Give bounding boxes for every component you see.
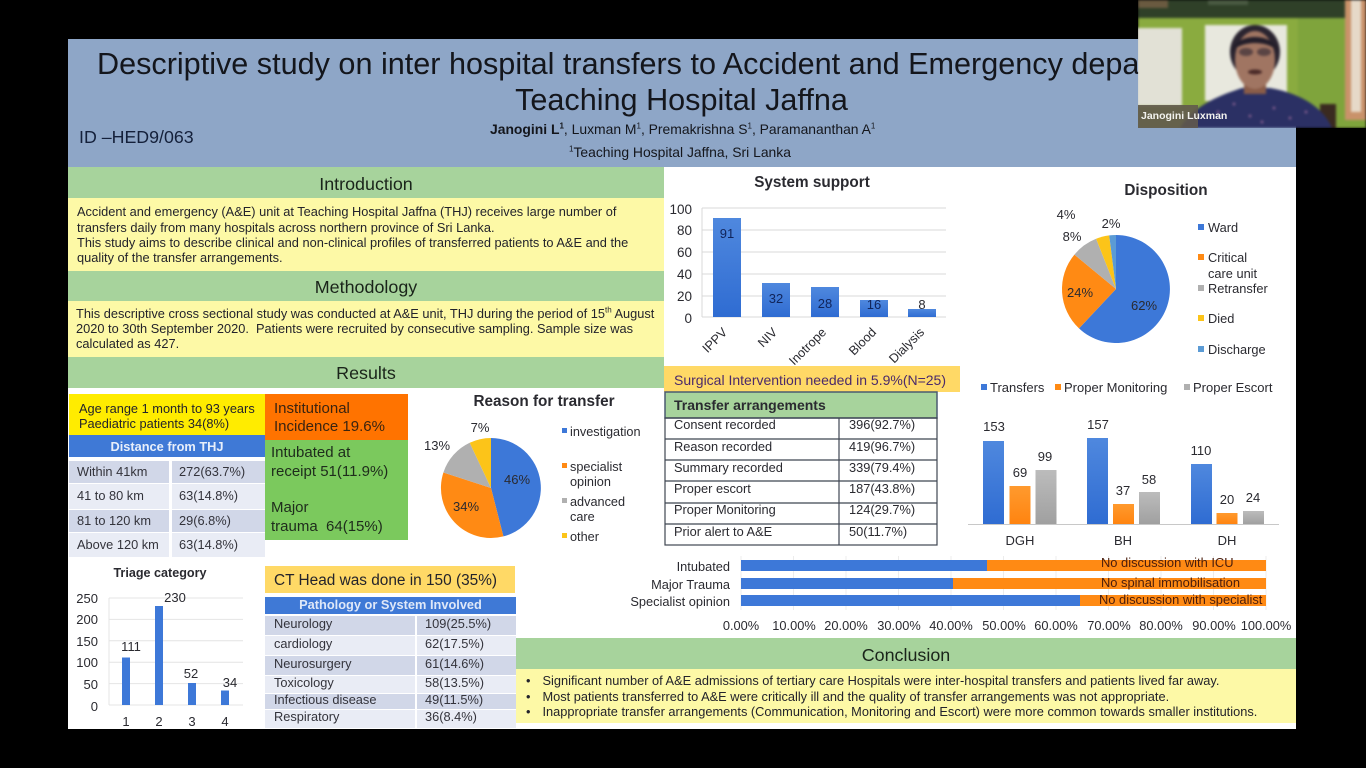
transfer row values: 124(29.7%) [849,502,915,517]
callout: institutional incidence [265,394,408,440]
callout: age range [69,394,265,435]
pie values: 34% [453,499,479,514]
system support values: 91 [720,226,734,241]
value 63 [172,484,265,509]
legend: advanced [570,495,625,509]
pathology header: Pathology or System Involved [299,597,482,612]
panel: conclusion text [516,669,1296,723]
hospital chart categories [1006,533,1236,548]
introduction line 2: transfers daily from many hospitals across northern province of Sri Lanka. [77,220,495,234]
system support y axis: 80 [677,223,692,238]
transfer row labels: Proper escort [674,481,751,496]
system support categories [700,325,927,368]
bar category labels: Specialist opinion [630,594,730,609]
system support categories: Inotrope [786,325,829,368]
row neurology [265,616,415,635]
panel: introduction heading [68,167,664,198]
legend [562,425,641,544]
transfer row labels: Summary recorded [674,460,783,475]
introduction line 4: quality of the transfer arrangements. [77,250,283,265]
row infectious disease [265,694,415,709]
callout: institutional incidence: Incidence 19.6% [274,418,385,435]
value 63 second [172,533,265,557]
panel: methodology heading: Methodology [315,276,417,296]
system support y axis: 100 [669,202,692,217]
value neurology: 109(25.5%) [425,616,491,631]
value toxicology [417,676,516,693]
value cardiology [417,636,516,655]
triage x axis: 1 [122,714,130,729]
disposition values: 4% [1057,207,1076,222]
triage x axis [122,714,229,729]
affiliation: 1Teaching Hospital Jaffna, Sri Lanka [569,144,791,160]
percent axis: 40.00% [929,618,973,633]
percent axis: 70.00% [1087,618,1131,633]
bar annotations: No discussion with specialist [1099,592,1263,607]
triage y axis [76,591,98,714]
triage bars [122,606,229,705]
value neurosurgery: 61(14.6%) [425,656,484,671]
pie values: 46% [504,472,530,487]
transfer row values: 187(43.8%) [849,481,915,496]
row 41 to 80 [69,484,169,509]
distance header [69,435,265,457]
slice ward [1079,235,1170,343]
value cardiology: 62(17.5%) [425,636,484,651]
legend: specialist [570,460,623,474]
disposition values: 2% [1102,216,1121,231]
abstract ID: ID –HED9/063 [79,127,194,147]
row above 120: Above 120 km [77,537,159,552]
hospital chart values: 37 [1116,483,1130,498]
row within 41km [69,461,169,483]
disposition legend [1198,220,1268,357]
blue bar segments [741,560,1080,606]
disposition legend: Critical [1208,250,1247,265]
row toxicology [265,676,415,693]
orange bar segments [953,560,1266,606]
transfer row values: 339(79.4%) [849,460,915,475]
triage title: Triage category [113,566,207,580]
triage y axis: 200 [76,612,98,627]
system support y axis: 60 [677,245,692,260]
triage y axis: 0 [91,699,98,714]
hospital chart values: 24 [1246,490,1260,505]
system support y axis: 0 [684,311,692,326]
callout: intubated and major trauma: Major [271,499,309,516]
triage values: 230 [164,590,186,605]
percent axis: 80.00% [1139,618,1183,633]
header band [68,39,1296,167]
slice other [470,438,491,488]
triage values [121,590,237,690]
triage values: 34 [223,675,237,690]
value 63 second: 63(14.8%) [179,537,238,552]
hospital chart categories: DH [1218,533,1236,548]
system support values [720,226,926,312]
conclusion bullet 1: • Significant number of A&E admissions of tertiary care Hospitals were inter-hospital transfers and patients lived far away. [526,673,1219,688]
hospital chart bars [983,438,1264,524]
system support categories: NIV [755,325,780,350]
hospital chart values: 99 [1038,449,1052,464]
hospital chart legend [981,380,1273,395]
bar category labels: Intubated [677,559,730,574]
pie values: 7% [471,420,490,435]
row toxicology: Toxicology [274,675,334,690]
hospital chart values: 58 [1142,472,1156,487]
methodology line 3: calculated as 427. [76,336,179,351]
disposition legend: Discharge [1208,342,1266,357]
value respiratory: 36(8.4%) [425,709,477,724]
slice investigation [491,438,541,536]
bar annotations: No discussion with ICU [1101,555,1234,570]
row cardiology [265,636,415,655]
hospital chart values: 153 [983,419,1005,434]
value toxicology: 58(13.5%) [425,675,484,690]
percent axis [723,618,1291,633]
hospital chart values: 20 [1220,492,1234,507]
disposition values [1057,207,1157,313]
percent axis: 60.00% [1034,618,1078,633]
bar annotations: No spinal immobilisation [1101,575,1240,590]
pie values: 13% [424,438,450,453]
callout: intubated and major trauma: trauma 64(15%) [271,518,383,534]
transfer row labels [674,417,783,539]
chart title: Reason for transfer [473,393,615,410]
slice specialist opinion [441,472,503,538]
panel: conclusion heading [516,638,1296,669]
bar category labels: Major Trauma [651,577,731,592]
panel: introduction heading: Introduction [319,174,413,194]
distance header: Distance from THJ [110,439,224,454]
row 81 to 120 [69,510,169,532]
transfer row labels: Consent recorded [674,417,776,432]
legend: investigation [570,425,641,439]
disposition values: 62% [1131,298,1157,313]
disposition legend: Retransfer [1208,281,1268,296]
transfer row values [849,417,915,539]
value neurosurgery [417,656,516,675]
system support values: 28 [818,296,832,311]
disposition values: 8% [1063,229,1082,244]
hospital chart values: 157 [1087,417,1109,432]
transfer row values: 50(11.7%) [849,524,907,539]
hospital chart values: 69 [1013,465,1027,480]
disposition legend: Ward [1208,220,1238,235]
transfer grid [665,418,937,545]
transfer header: Transfer arrangements [674,397,826,413]
triage values: 111 [121,639,141,654]
system support y axis [669,202,692,326]
row respiratory: Respiratory [274,709,339,724]
callout: intubated and major trauma [265,440,408,540]
row 81 to 120: 81 to 120 km [77,513,151,528]
row within 41km: Within 41km [77,464,147,479]
authors: Janogini L1, Luxman M1, Premakrishna S1, Paramananthan A1 [490,121,875,137]
hospital chart values [983,417,1260,507]
slice discharge [1109,235,1116,289]
row infectious disease: Infectious disease [274,692,376,707]
row 41 to 80: 41 to 80 km [77,488,144,503]
callout: CT head [265,566,515,593]
panel: methodology text [68,301,664,357]
panel: methodology heading [68,271,664,301]
webcam overlay: presenter [1138,0,1366,128]
system support values: 8 [918,297,926,312]
slice retransfer [1074,239,1116,289]
triage y axis: 50 [84,677,98,692]
panel: introduction text [68,198,664,271]
value 29 [172,510,265,532]
hospital chart categories: DGH [1006,533,1034,548]
hospital chart categories: BH [1114,533,1132,548]
hospital chart legend: Proper Monitoring [1064,380,1167,395]
transfer row labels: Proper Monitoring [674,502,776,517]
callout: age range: Paediatric patients 34(8%) [79,416,229,431]
transfer row values: 396(92.7%) [849,417,915,432]
triage x axis: 4 [221,714,229,729]
conclusion bullet 2: • Most patients transferred to A&E were critically ill and the quality of transfer arrangements was not appropriate. [526,689,1169,704]
title: Descriptive study on inter hospital transfers to Accident and Emergency department [97,47,1226,81]
callout: institutional incidence: Institutional [274,400,350,417]
triage y axis: 150 [76,634,98,649]
presenter name: Janogini Luxman [1141,110,1227,122]
value 63: 63(14.8%) [179,488,238,503]
value 29: 29(6.8%) [179,513,231,528]
callout: intubated and major trauma: Intubated at [271,444,350,461]
row neurosurgery [265,656,415,675]
percent axis: 50.00% [982,618,1026,633]
percent axis: 100.00% [1241,618,1291,633]
value 272 [172,461,265,483]
percent axis: 10.00% [772,618,816,633]
introduction line 3: This study aims to describe clinical and non-clinical profiles of transferred patients to A&E and the [77,234,628,250]
slice critical care unit [1062,255,1116,328]
system support y axis: 20 [677,289,692,304]
pathology header [265,597,516,614]
triage x axis: 3 [188,714,196,729]
introduction line 1: Accident and emergency (A&E) unit at Teaching Hospital Jaffna (THJ) receives large number of [77,204,616,219]
percent axis: 30.00% [877,618,921,633]
table: pathology or system involved [265,597,516,728]
hospital chart values: 110 [1191,443,1211,458]
system support categories: Dialysis [886,325,927,366]
panel: conclusion heading: Conclusion [862,644,950,664]
callout: surgical intervention: Surgical Intervention needed in 5.9%(N=25) [674,372,946,388]
legend: other [570,530,600,544]
system support values: 32 [769,291,783,306]
system support values: 16 [867,297,881,312]
transfer row values: 419(96.7%) [849,439,915,454]
slice advanced care [443,443,491,488]
methodology line 1: This descriptive cross sectional study was conducted at A&E unit, THJ during the period of 15th August [76,306,654,321]
panel: results heading: Results [336,363,396,383]
bar annotations [1099,555,1263,607]
system support bars [713,218,936,317]
triage x axis: 2 [155,714,163,729]
disposition values: 24% [1067,285,1093,300]
table: distance from THJ [69,435,265,557]
callout: intubated and major trauma: receipt 51(11.9%) [271,462,388,480]
system support categories: Blood [846,325,879,358]
triage values: 52 [184,666,198,681]
transfer header [665,392,937,418]
bar category labels [630,559,731,609]
disposition title: Disposition [1124,182,1208,199]
system support title: System support [754,174,870,191]
row neurology: Neurology [274,616,332,631]
row respiratory [265,710,415,728]
callout: age range: Age range 1 month to 93 years [79,401,255,416]
triage y axis: 250 [76,591,98,606]
system support y axis: 40 [677,267,692,282]
disposition legend: care unit [1208,266,1258,281]
value respiratory [417,710,516,728]
disposition legend: Died [1208,311,1234,326]
slice died [1096,235,1116,289]
row above 120 [69,533,169,557]
row cardiology: cardiology [274,636,332,651]
value 272: 272(63.7%) [179,464,245,479]
percent axis: 20.00% [824,618,868,633]
callout: surgical intervention [664,366,960,392]
value neurology [417,616,516,635]
row neurosurgery: Neurosurgery [274,656,352,671]
hospital chart legend: Proper Escort [1193,380,1273,395]
methodology line 2: 2020 to 30th September 2020. Patients were recruited by consecutive sampling. Sample size was [76,321,633,336]
panel: results heading [68,357,664,388]
triage y axis: 100 [76,655,98,670]
percent axis: 90.00% [1192,618,1236,633]
pie values [424,420,530,514]
callout: CT head: CT Head was done in 150 (35%) [274,572,497,589]
conclusion bullet 3: • Inappropriate transfer arrangements (Communication, Monitoring and Escort) were more common towards smaller institutions. [526,704,1257,719]
legend: opinion [570,475,611,489]
percent axis: 0.00% [723,618,759,633]
transfer row labels: Reason recorded [674,439,772,454]
hospital chart legend: Transfers [990,380,1045,395]
legend: care [570,510,595,524]
system support categories: IPPV [700,325,730,356]
value infectious disease [417,694,516,709]
value infectious disease: 49(11.5%) [425,692,483,707]
transfer row labels: Prior alert to A&E [674,524,772,539]
title second line: Teaching Hospital Jaffna [515,83,848,117]
